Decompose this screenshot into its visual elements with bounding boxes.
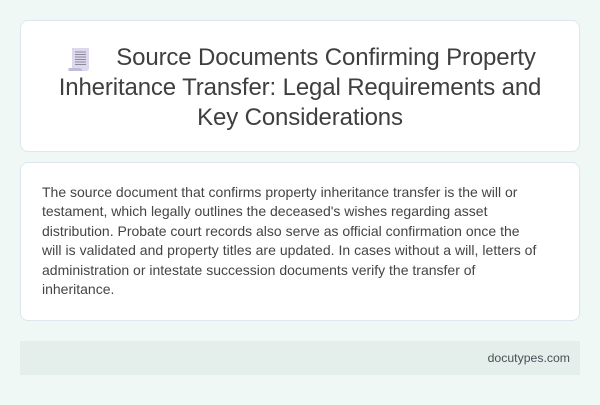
description text bbox=[42, 184, 536, 297]
panel: description bbox=[20, 162, 580, 321]
description text: inheritance. bbox=[42, 281, 114, 297]
icon: document scroll bbox=[68, 48, 89, 71]
title bbox=[59, 44, 541, 131]
description text: The source document that confirms property inheritance transfer is the will or bbox=[42, 184, 517, 200]
title: Source Documents Confirming Property bbox=[116, 44, 536, 71]
title: Inheritance Transfer: Legal Requirements and bbox=[59, 74, 541, 101]
panel: title card bbox=[20, 20, 580, 152]
description text: distribution. Probate court records also serve as official confirmation once the bbox=[42, 223, 520, 239]
description text: administration or intestate succession documents verify the transfer of bbox=[42, 262, 475, 278]
footer source text: docutypes.com bbox=[488, 351, 570, 365]
panel: footer bbox=[20, 341, 580, 375]
description text: will is validated and property titles are updated. In cases without a will, letters of bbox=[42, 242, 536, 258]
title: Key Considerations bbox=[197, 104, 403, 131]
description text: testament, which legally outlines the deceased's wishes regarding asset bbox=[42, 203, 487, 219]
